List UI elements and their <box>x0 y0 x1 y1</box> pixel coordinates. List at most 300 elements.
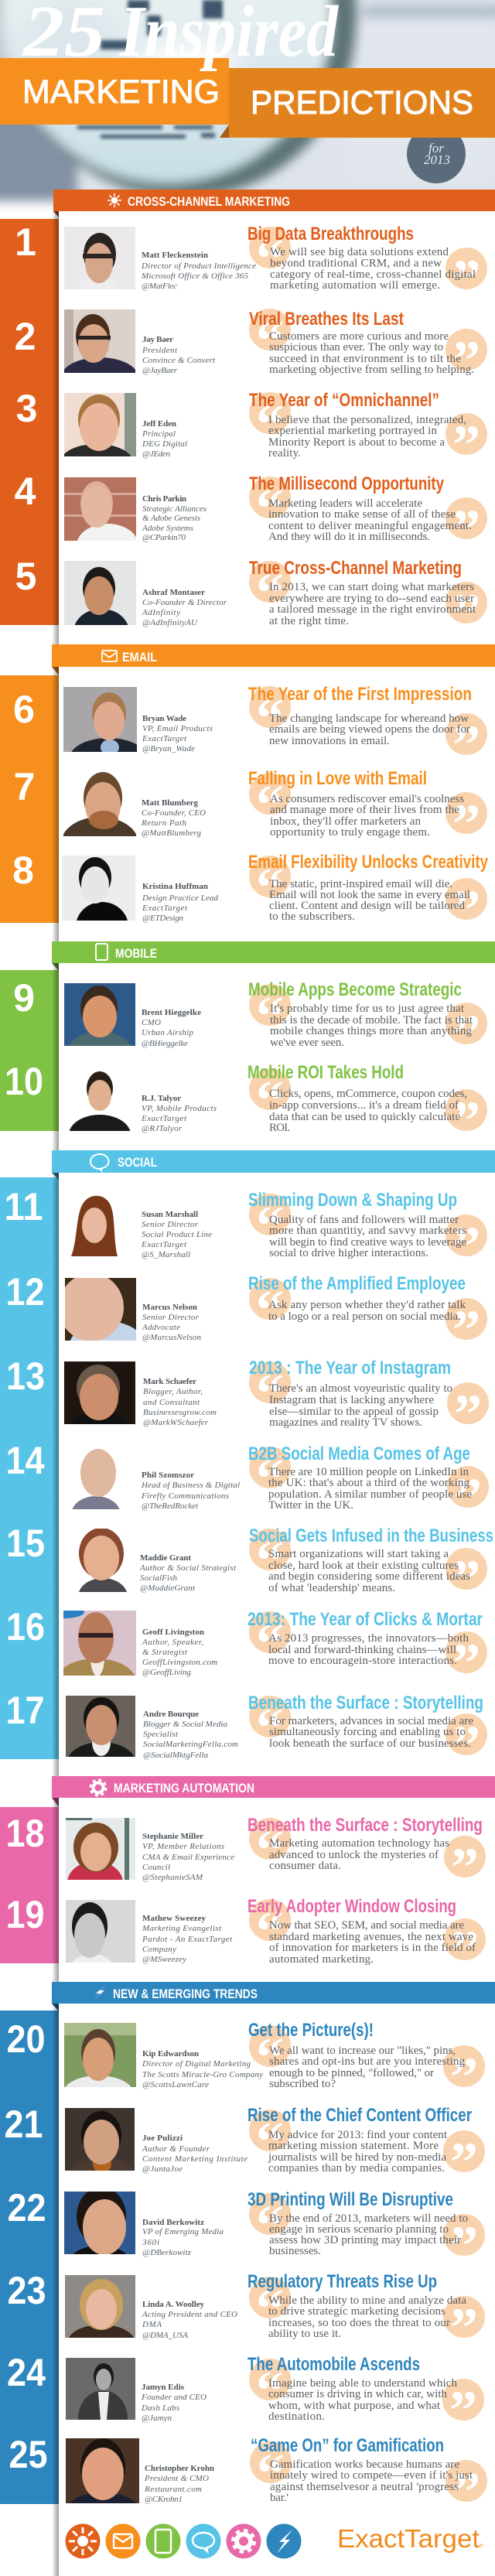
quote text: The static, print-inspired email will die. <box>269 878 452 890</box>
quote marks: “ <box>256 1900 284 1962</box>
quote text: innately wired to compete—even if it's just <box>270 2469 473 2482</box>
quote marks: ” <box>452 583 480 644</box>
photo: Jamyn Edis <box>66 2358 135 2420</box>
byline: Mark Schaefer <box>143 1377 196 1386</box>
number: 15 <box>6 1522 45 1565</box>
section bar <box>52 1776 495 1807</box>
prediction 11 <box>5 1185 487 1277</box>
number: 7 <box>14 765 35 808</box>
prediction 16 <box>6 1605 487 1705</box>
byline: Mathew Sweezey <box>142 1914 206 1923</box>
section bar: CROSS-CHANNEL MARKETING <box>128 194 290 209</box>
section bar: MOBILE <box>115 946 157 961</box>
byline: Linda A. Woolley <box>142 2300 204 2309</box>
quote text: of innovation for marketers is in the field of <box>269 1942 476 1954</box>
byline <box>142 1008 201 1048</box>
byline: @StephanieSAM <box>142 1873 203 1882</box>
quote marks <box>249 1818 486 1898</box>
byline: Founder and CEO <box>141 2393 207 2402</box>
photo: Phil Szomszor <box>72 1449 119 1509</box>
byline: SocialFish <box>140 1573 178 1583</box>
quote text: We will see big data solutions extend <box>270 246 449 258</box>
quote text: whom, with what purpose, and what <box>268 2400 441 2412</box>
quote text: engage in serious scenario planning to <box>269 2223 449 2236</box>
heading: The Year of “Omnichannel” <box>249 390 439 411</box>
quote text: category of real-time, cross-channel digital <box>270 268 476 281</box>
quote text: The changing landscape for whereand how <box>269 712 469 725</box>
byline: Restaurant.com <box>144 2485 202 2494</box>
quote text: For marketers, advances in social media are <box>269 1715 473 1727</box>
quote marks <box>249 227 487 310</box>
prediction 25 <box>9 2433 487 2526</box>
quote marks: ” <box>452 2461 480 2523</box>
quote marks <box>250 2441 487 2523</box>
byline: Principal <box>142 429 176 439</box>
section: email <box>0 644 495 951</box>
prediction 19 <box>6 1893 486 1982</box>
quote text: Twitter in the UK. <box>268 1499 353 1512</box>
hero header <box>0 0 495 201</box>
byline <box>142 2049 263 2089</box>
quote text: and manage more of their lives from the <box>270 804 459 816</box>
quote text: advanced to unlock the mysteries of <box>269 1849 439 1861</box>
ExactTarget logo: ® <box>480 2544 483 2549</box>
quote text: As 2013 progresses, the innovators—both <box>268 1632 469 1645</box>
section bar <box>52 1150 495 1180</box>
quote marks <box>249 984 487 1065</box>
byline: @MattBlumberg <box>142 828 201 838</box>
byline: @CParkin70 <box>142 533 186 542</box>
prediction 21 <box>5 2103 485 2198</box>
quote marks: ” <box>452 1299 480 1361</box>
icon: automation <box>226 2523 261 2559</box>
number column <box>0 219 59 625</box>
byline: Senior Director <box>142 1220 199 1229</box>
byline: Microsoft Office & Office 365 <box>141 272 249 281</box>
byline: Urban Airship <box>142 1028 193 1037</box>
quote text: of what 'leadership' means. <box>268 1582 395 1594</box>
byline <box>141 1471 240 1511</box>
byline: Director of Digital Marketing <box>142 2059 251 2069</box>
heading: The Millisecond Opportunity <box>249 473 445 494</box>
byline: @DMA_USA <box>142 2331 188 2340</box>
byline: The Scotts Miracle-Gro Company <box>142 2070 263 2079</box>
quote marks <box>249 477 487 560</box>
quote text <box>268 2294 466 2340</box>
byline: Joe Pulizzi <box>142 2134 183 2143</box>
byline: Marketing Evangelist <box>142 1924 222 1933</box>
byline <box>141 251 256 291</box>
byline <box>142 588 227 627</box>
prediction 10 <box>5 1060 487 1155</box>
icon: envelope <box>102 651 117 661</box>
byline: Andre Bourque <box>143 1710 199 1719</box>
section bar <box>52 1982 495 2011</box>
quote text <box>270 2458 473 2504</box>
quote marks: “ <box>256 227 284 289</box>
quote marks: “ <box>256 1612 284 1674</box>
right banner: predictions <box>220 68 495 138</box>
byline: ExactTarget <box>142 904 188 913</box>
quote text: Now that SEO, SEM, and social media are <box>269 1919 464 1932</box>
byline: Director of Product Intelligence <box>141 261 256 271</box>
quote text: standard marketing avenues, the next wave <box>269 1931 473 1943</box>
quote text <box>270 793 464 839</box>
byline: Blogger, Author, <box>143 1387 203 1396</box>
quote text: this is the decade of mobile. The fact is that <box>270 1014 473 1027</box>
quote text: content to deliver meaningful engagement. <box>268 520 472 532</box>
byline: @Jamyn <box>142 2414 172 2423</box>
byline: DEG Digital <box>142 439 187 449</box>
byline: @TheRedRocket <box>142 1502 199 1511</box>
number: 1 <box>15 220 36 264</box>
quote text <box>269 1382 452 1429</box>
quote text: against themselvesor a neutral 'progress <box>270 2481 459 2493</box>
number: 8 <box>12 849 34 892</box>
byline: Bryan Wade <box>142 714 186 723</box>
photo: Geoff Livingston <box>63 1611 136 1676</box>
number: 19 <box>6 1893 45 1936</box>
quote text <box>269 878 470 923</box>
byline: Adobe Systems <box>142 524 193 533</box>
quote text <box>269 2212 468 2257</box>
prediction 18 <box>6 1812 486 1905</box>
byline: 360i <box>142 2238 159 2247</box>
number: 24 <box>7 2351 46 2394</box>
prediction 2 <box>15 309 487 398</box>
byline: @S_Marshall <box>142 1250 190 1259</box>
quote text: new innovations in email. <box>269 735 390 747</box>
quote text: destination. <box>268 2410 325 2423</box>
script title <box>22 0 340 72</box>
photo: Kip Edwardson <box>64 2023 136 2087</box>
quote marks: “ <box>256 1447 284 1509</box>
byline <box>141 2383 207 2423</box>
number: 12 <box>6 1270 45 1314</box>
byline: AdInfinity <box>142 608 180 617</box>
quote text <box>269 712 470 747</box>
quote text: Minority Report is about to become a <box>268 436 445 449</box>
photo: Jeff Eden <box>64 393 136 456</box>
quote text: ROI. <box>269 1122 290 1134</box>
section: social <box>0 1150 495 1782</box>
byline: President <box>142 346 178 355</box>
quote text <box>268 1632 469 1667</box>
heading: Viral Breathes Its Last <box>249 309 404 330</box>
quote marks: “ <box>256 1194 284 1256</box>
quote marks: “ <box>256 774 284 835</box>
quote marks: ” <box>452 1714 480 1776</box>
quote text: Imagine being able to understand which <box>268 2377 458 2390</box>
prediction 9 <box>13 976 487 1074</box>
section bar <box>52 644 495 675</box>
quote text: to a logo or a real person on social media. <box>268 1310 461 1323</box>
byline: @BHieggelke <box>142 1039 188 1048</box>
photo: Mark Schaefer <box>64 1361 135 1424</box>
quote marks: “ <box>256 477 284 539</box>
byline: @GeoffLiving <box>142 1668 192 1677</box>
number: 18 <box>6 1812 45 1855</box>
quote text <box>270 246 476 292</box>
quote text: to the subscribers. <box>269 910 355 923</box>
quote text: succeed in that environment is to tilt the <box>269 353 461 365</box>
quote text <box>268 414 466 460</box>
quote text: And they will do it in milliseconds. <box>268 531 430 543</box>
byline: Jeff Eden <box>142 419 176 429</box>
quote marks: ” <box>452 1215 480 1277</box>
quote text: to drive strategic marketing decisions <box>268 2305 446 2318</box>
quote marks: ” <box>452 1632 480 1694</box>
byline: DMA <box>142 2320 162 2329</box>
quote text: There's an almost voyeuristic quality to <box>269 1382 452 1395</box>
quote marks <box>249 1194 487 1277</box>
quote marks: ” <box>454 1467 482 1529</box>
quote marks: ” <box>452 248 480 310</box>
number column <box>0 970 59 1131</box>
quote text: local and forward-thinking chains—will <box>268 1644 456 1656</box>
section bar: EMAIL <box>122 650 157 664</box>
photo: Matt Fleckenstein <box>64 227 135 289</box>
number: 25 <box>9 2433 48 2476</box>
quote text: marketing mission statement. More <box>268 2140 439 2152</box>
byline: Senior Director <box>142 1313 200 1322</box>
byline <box>142 2134 248 2174</box>
icon: sunburst <box>108 193 121 207</box>
number: 17 <box>6 1689 45 1732</box>
section: new and emerging trends <box>0 1982 495 2526</box>
section: marketing automation <box>0 1776 495 1982</box>
byline: R.J. Talyor <box>142 1094 181 1103</box>
byline: Dash Labs <box>141 2403 179 2413</box>
quote marks: ” <box>452 714 480 776</box>
byline: Kip Edwardson <box>142 2049 199 2058</box>
quote marks <box>249 2193 485 2277</box>
number: 13 <box>6 1355 45 1398</box>
byline: VP, Email Products <box>142 724 213 733</box>
quote text <box>269 1837 449 1872</box>
byline <box>139 1553 237 1593</box>
byline: Strategic Alliances <box>142 504 207 514</box>
byline: Geoff Livingston <box>142 1628 204 1637</box>
icon: gear <box>90 1780 106 1795</box>
byline: Author, Speaker, <box>142 1638 203 1647</box>
quote marks: ” <box>452 1090 480 1152</box>
quote marks <box>249 561 487 644</box>
byline <box>143 1377 217 1427</box>
section bar: NEW & EMERGING TRENDS <box>113 1987 258 2001</box>
quote text: more than quantitiy, and savvy marketers <box>269 1225 466 1237</box>
byline: Jamyn Edis <box>142 2383 185 2392</box>
byline <box>142 2300 237 2340</box>
icon: mobile <box>145 2523 181 2559</box>
quote text: will begin to find creative ways to leverage <box>269 1236 466 1249</box>
quote text: everywhere are trying to do--send each user <box>269 593 474 605</box>
byline: Maddie Grant <box>140 1553 191 1563</box>
quote text: Email will not look the same in every email <box>269 889 470 901</box>
quote marks: ” <box>451 1836 479 1898</box>
icon: phone <box>96 944 108 960</box>
byline: VP, Member Relations <box>142 1842 224 1851</box>
quote marks <box>249 1696 487 1776</box>
byline: @ScottsLawnCare <box>142 2080 209 2089</box>
byline: Matt Blumberg <box>142 798 198 808</box>
ExactTarget logo: ExactTarget <box>337 2524 480 2553</box>
byline: Brent Hieggelke <box>142 1008 201 1017</box>
heading: Mobile ROI Takes Hold <box>248 1062 404 1083</box>
quote text: mobile changes things more than anything <box>270 1025 472 1037</box>
quote text: close, hard look at their existing cultures <box>268 1560 459 1572</box>
quote text: opportunity to truly engage them. <box>270 826 430 839</box>
prediction 5 <box>15 555 487 655</box>
quote text <box>269 1088 467 1134</box>
quote marks: ” <box>452 414 480 476</box>
quote text: automated marketing. <box>269 1953 374 1966</box>
quote marks: “ <box>256 2026 284 2088</box>
photo: Linda A. Woolley <box>65 2275 135 2338</box>
quote marks <box>249 1447 489 1529</box>
quote text <box>269 581 476 627</box>
quote text: bar.' <box>270 2492 288 2504</box>
photo: Brent Hieggelke <box>64 983 135 1046</box>
byline <box>142 419 187 459</box>
quote text: Quality of fans and followers will matter <box>269 1214 459 1226</box>
number: 22 <box>8 2186 46 2229</box>
byline: Company <box>142 1945 176 1954</box>
quote marks <box>249 2359 484 2441</box>
quote marks: ” <box>451 1919 479 1981</box>
quote text <box>269 330 474 376</box>
quote marks: “ <box>256 393 284 455</box>
number: 14 <box>6 1439 45 1482</box>
quote text <box>268 1548 470 1594</box>
quote text: shares and opt-ins but are you interesting <box>269 2055 466 2068</box>
prediction 15 <box>6 1522 493 1615</box>
byline: Stephanie Miller <box>142 1832 203 1841</box>
photo: Ashraf Montaser <box>64 561 136 625</box>
number: 9 <box>13 976 35 1020</box>
byline: and Consultant <box>143 1398 200 1407</box>
icon: email <box>105 2523 141 2559</box>
number: 3 <box>16 387 37 430</box>
section: mobile <box>0 941 495 1155</box>
quote text: journalists will be hired by non-media <box>268 2151 446 2164</box>
quote marks: “ <box>256 2194 284 2256</box>
byline: Chris Parkin <box>142 494 186 504</box>
icon: trends <box>266 2523 302 2559</box>
number: 23 <box>8 2269 46 2312</box>
quote text: Marketing leaders will accelerate <box>268 497 422 510</box>
photo: Joe Pulizzi <box>65 2108 135 2171</box>
byline: Design Practice Lead <box>142 893 218 903</box>
quote text: ability to use it. <box>268 2328 341 2340</box>
quote marks: “ <box>256 2277 284 2339</box>
heading: The Automobile Ascends <box>248 2354 420 2375</box>
quote text: Customers are more curious and more <box>269 330 449 343</box>
heading: 2013 : The Year of Instagram <box>249 1358 451 1379</box>
photo: Mathew Sweezey <box>66 1900 135 1963</box>
number: 21 <box>5 2103 43 2146</box>
byline <box>141 798 206 838</box>
quote text: in-app conversions... it's a dream field of <box>269 1099 459 1112</box>
quote marks: “ <box>256 2110 284 2172</box>
quote text: We all want to increase our "likes," pins, <box>269 2045 456 2057</box>
prediction 8 <box>12 849 489 951</box>
byline: ExactTarget <box>142 734 187 743</box>
quote marks: ” <box>450 2046 478 2108</box>
quote text: the UK: that's about a third of the working <box>268 1477 470 1489</box>
quote text: emails are being viewed opens the door for <box>269 723 470 736</box>
byline <box>142 1832 234 1882</box>
quote text <box>268 497 472 543</box>
year badge: for <box>428 141 444 155</box>
byline <box>142 882 218 923</box>
quote marks <box>249 1068 487 1152</box>
quote marks: ” <box>450 2215 478 2277</box>
byline: Content Marketing Institute <box>142 2154 248 2164</box>
footer category icons <box>65 2523 302 2559</box>
photo: Andre Bourque <box>66 1696 135 1757</box>
heading: Get the Picture(s)! <box>248 2020 374 2041</box>
quote text: magazines and reality TV shows. <box>269 1416 422 1429</box>
number column <box>0 1807 59 1963</box>
byline: Susan Marshall <box>142 1210 198 1219</box>
byline: Social Product Line <box>142 1230 212 1239</box>
byline: Co-Founder, CEO <box>142 808 206 818</box>
quote text: increases, so too does the threat to our <box>268 2317 450 2329</box>
quote text <box>269 1715 473 1750</box>
byline: CMA & Email Experience <box>142 1853 234 1862</box>
quote text: consumer is driving in which car, with <box>268 2388 447 2400</box>
byline: Author & Founder <box>142 2144 210 2154</box>
quote marks: “ <box>256 2359 284 2421</box>
quote marks: ” <box>452 330 480 391</box>
quote text: I believe that the personalized, integrated, <box>268 414 466 426</box>
number: 11 <box>5 1185 43 1228</box>
quote marks: “ <box>256 562 284 624</box>
photo: Matt Blumberg <box>63 772 136 836</box>
quote text: suspicious than ever. The only way to <box>269 341 443 354</box>
quote marks: “ <box>256 856 284 918</box>
quote text: look beneath the surface of our businesses. <box>269 1737 471 1750</box>
byline <box>141 1210 212 1259</box>
byline: Head of Business & Digital <box>141 1481 240 1490</box>
quote text: reality. <box>268 447 301 460</box>
quote text <box>268 1299 466 1323</box>
quote text: consumer data. <box>269 1860 341 1872</box>
byline: @CKrohn1 <box>145 2495 183 2504</box>
byline <box>142 1628 217 1677</box>
quote text: businesses. <box>269 2245 321 2257</box>
byline: @JuntaJoe <box>142 2164 183 2174</box>
number column <box>0 675 59 923</box>
number: 20 <box>6 2017 45 2061</box>
quote marks <box>249 1611 487 1694</box>
byline: Author & Social Strategist <box>139 1563 237 1573</box>
byline: @AdInfinityAU <box>142 618 198 627</box>
byline: @JayBaer <box>142 366 178 375</box>
quote text: There are 10 million people on LinkedIn in <box>268 1466 469 1478</box>
quote text: Gamification works because humans are <box>270 2458 459 2471</box>
quote text: data that can be used to quickly calculate <box>269 1111 460 1123</box>
byline <box>143 1710 238 1760</box>
byline: & Adobe Genesis <box>142 514 200 523</box>
quote text: enough to be pinned, "followed," or <box>269 2067 434 2079</box>
quote marks: “ <box>256 985 284 1047</box>
prediction 6 <box>13 684 487 778</box>
quote text: subscribed to? <box>269 2078 336 2090</box>
quote text <box>268 1466 472 1512</box>
byline: @DBerkowitz <box>142 2248 192 2257</box>
